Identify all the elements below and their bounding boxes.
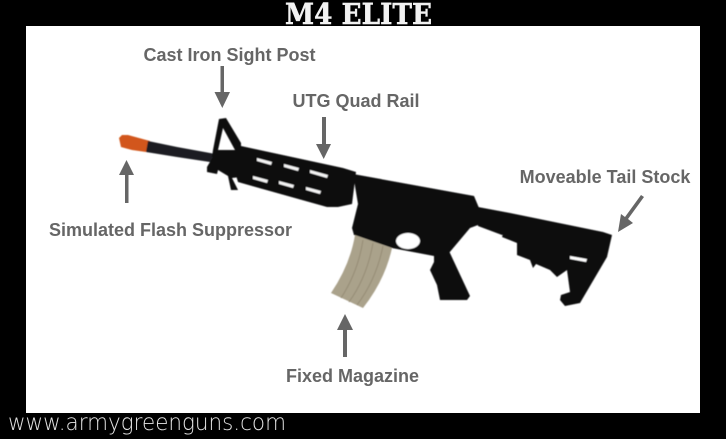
- arrow: to magazine: [337, 314, 353, 357]
- front sight post: [212, 118, 241, 157]
- rail slots: [253, 158, 328, 194]
- arrow: to sight post: [214, 66, 230, 108]
- label: cast iron sight post: Cast Iron Sight Post: [143, 45, 316, 65]
- arrow: to flash suppressor: [119, 160, 134, 203]
- pistol grip: [430, 251, 470, 300]
- moveable tail stock: [502, 213, 612, 306]
- sight base: [207, 154, 240, 190]
- arrow: to tail stock: [618, 195, 644, 232]
- barrel: [146, 141, 215, 163]
- label: quad rail: UTG Quad Rail: [292, 91, 420, 111]
- trigger guard opening: [396, 233, 420, 249]
- buffer tube: [478, 207, 512, 235]
- arrow: to quad rail: [316, 117, 331, 159]
- flash suppressor: [119, 135, 150, 152]
- magazine ribs: [341, 240, 383, 305]
- label: fixed magazine: Fixed Magazine: [286, 366, 419, 386]
- quad rail: [235, 146, 356, 207]
- website address: www.armygreenguns.com: [8, 410, 286, 436]
- fixed magazine: [331, 235, 392, 308]
- receiver: [352, 174, 479, 256]
- label: flash suppressor: Simulated Flash Suppressor: [49, 220, 292, 240]
- rifle illustration: [119, 118, 612, 308]
- label: tail stock: Moveable Tail Stock: [520, 167, 691, 187]
- stock slot: [570, 256, 587, 262]
